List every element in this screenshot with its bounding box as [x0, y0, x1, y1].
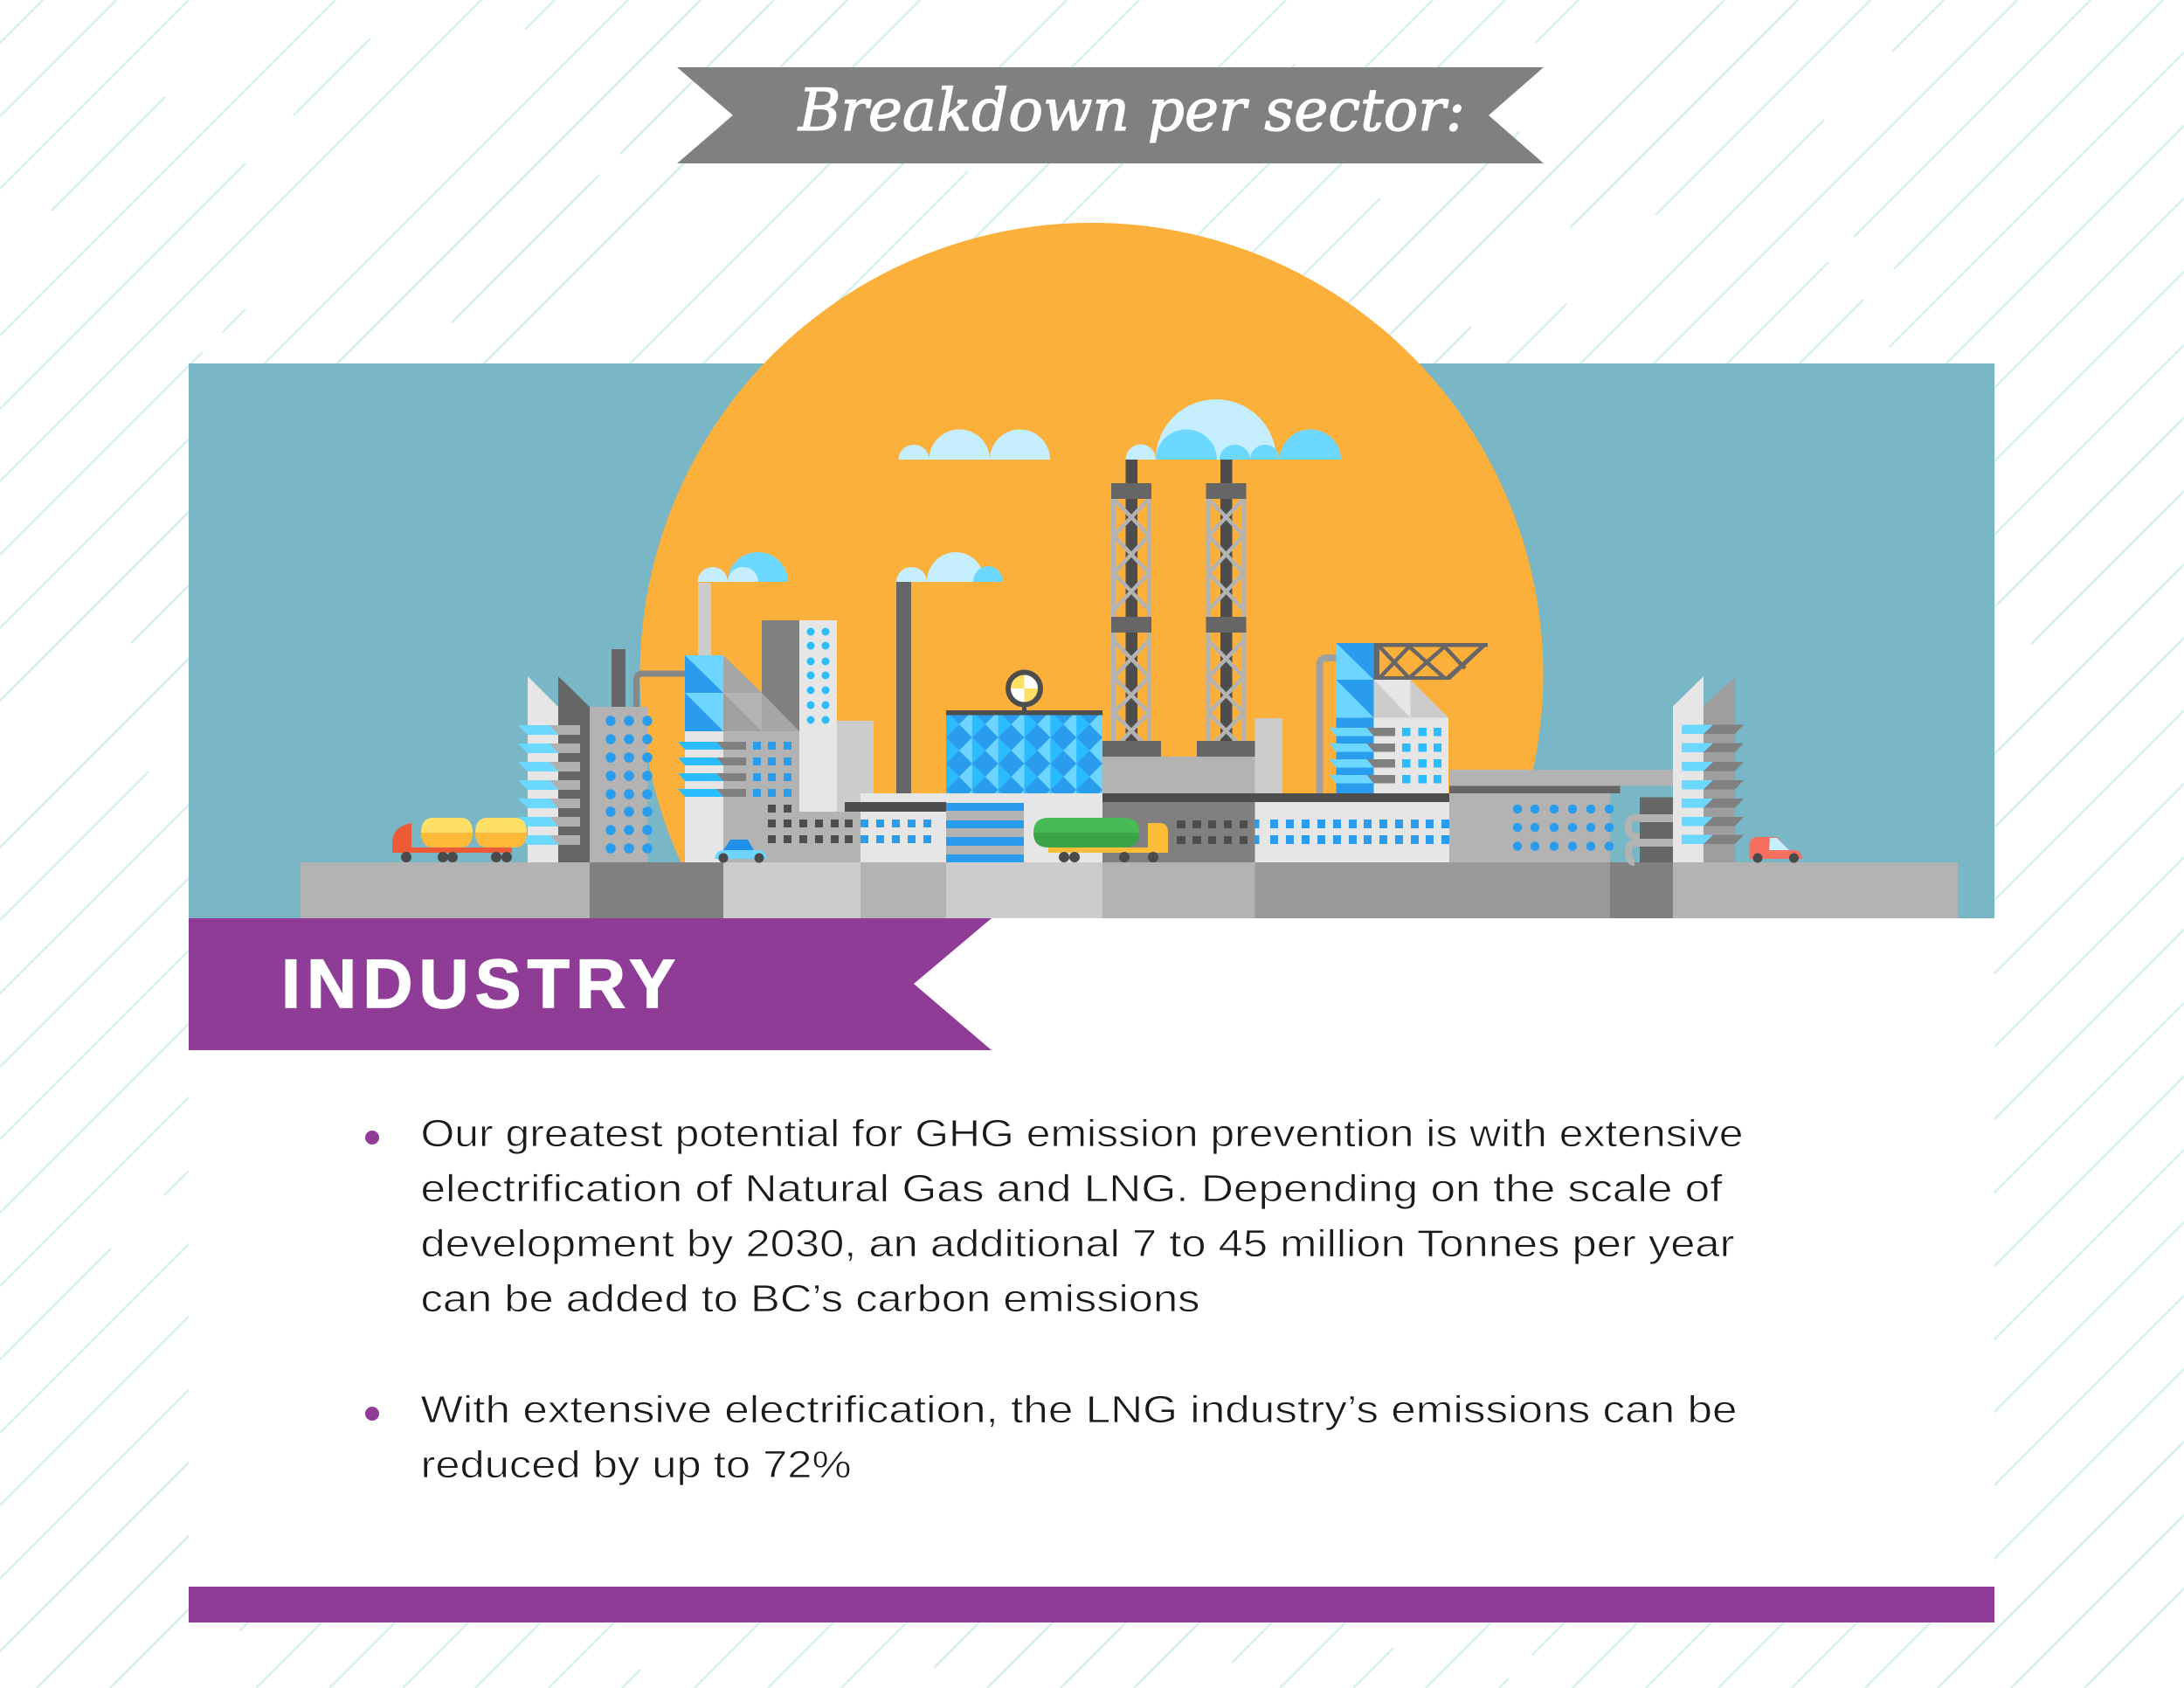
car: blue [715, 840, 767, 859]
bullet dot [365, 1131, 379, 1145]
cloud: above left refinery stack [697, 552, 788, 582]
building: refinery block with blue facade [678, 620, 874, 862]
building: dark column with coils [1628, 797, 1673, 862]
building: blue diamond facade [946, 710, 1102, 793]
building: right twin-peak tower [1673, 676, 1744, 862]
text block: first bullet [365, 1112, 1744, 1320]
building: right low block with dots [1449, 770, 1673, 862]
building: crane tower [1319, 643, 1488, 793]
chimney: light grey stack [698, 583, 711, 655]
crane arm [1373, 643, 1488, 680]
title text: Breakdown per sector: [798, 77, 1465, 144]
panel: white content card [189, 918, 1994, 1622]
building: tower base and lower block [1102, 718, 1282, 862]
text block: second bullet [365, 1388, 1737, 1486]
paragraph one [421, 1112, 1744, 1320]
panel: teal sky background [189, 363, 1994, 918]
chimney: dark stack [896, 582, 911, 793]
bullet dot [365, 1407, 379, 1421]
paragraph two: reduced by up to 72% [421, 1443, 851, 1486]
car: red [1749, 837, 1802, 859]
truck: green tanker [1033, 818, 1168, 857]
building: left twin-peak tower [518, 676, 590, 862]
bottom purple bar [189, 1587, 1994, 1622]
banner heading: INDUSTRY [281, 944, 675, 1022]
cooling tower: left [1111, 460, 1151, 749]
ground blocks [301, 862, 1958, 918]
cloud: top centre [898, 430, 1050, 460]
truck: orange with yellow tanks [392, 818, 527, 857]
cooling tower: right [1206, 460, 1246, 749]
cloud: above cooling towers [1125, 399, 1341, 460]
paragraph one: Our greatest potential for GHG emission prevention is with extensive [421, 1112, 1744, 1155]
banner: INDUSTRY [189, 918, 992, 1050]
icon: rooftop gauge [1008, 673, 1040, 711]
building: dotted grey block with chimney and pipe [590, 649, 685, 862]
paragraph one: can be added to BC’s carbon emissions [421, 1277, 1200, 1320]
cloud: above dark chimney [896, 552, 1003, 582]
illustration: industrial skyline [301, 399, 1958, 918]
sun [640, 223, 1544, 874]
building: long white block with windows [1102, 793, 1449, 862]
paragraph one: electrification of Natural Gas and LNG. Depending on the scale of [421, 1167, 1723, 1210]
paragraph two: With extensive electrification, the LNG industry’s emissions can be [421, 1388, 1737, 1431]
title ribbon [677, 67, 1544, 163]
building: central block with stripes [845, 793, 1102, 862]
paragraph one: development by 2030, an additional 7 to 45 million Tonnes per year [421, 1222, 1735, 1265]
paragraph two [421, 1388, 1737, 1486]
